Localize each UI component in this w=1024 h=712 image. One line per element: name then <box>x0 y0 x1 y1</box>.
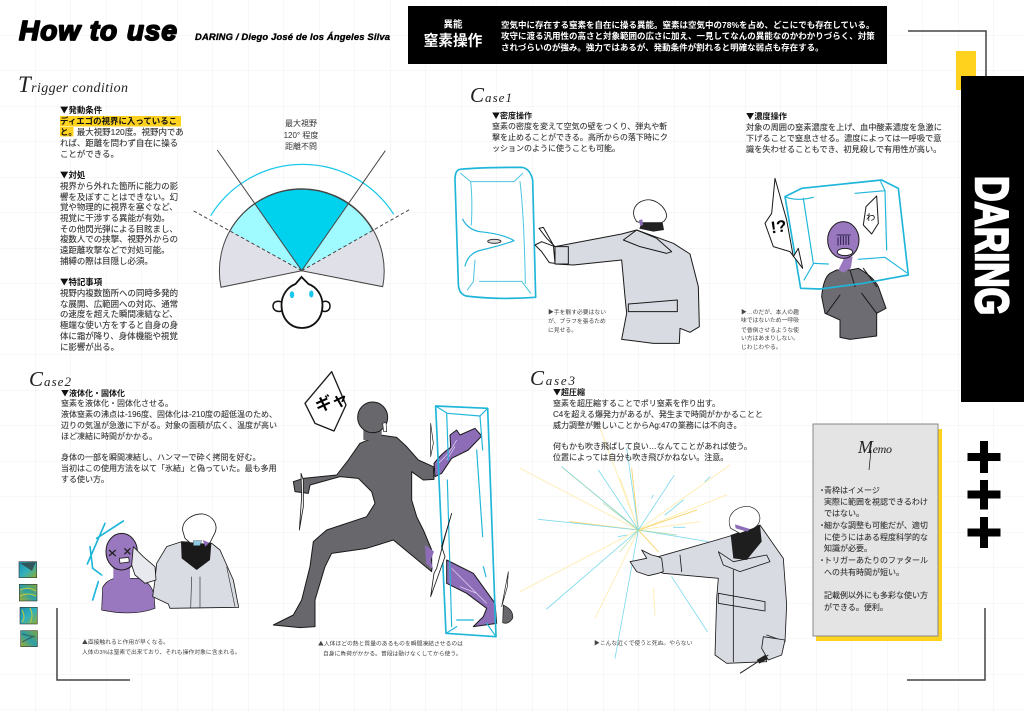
panel: ability summary: 窒素操作 <box>424 32 483 50</box>
text block: trigger conditions: 極端な使い方をすると自身の身 <box>60 320 178 330</box>
text block: liquefy and solidify: 身体の一部を瞬間凍結し、ハンマーで砕く拷問を好む。 <box>61 452 261 462</box>
yellow accent <box>956 51 976 90</box>
illustration: nitrogen cube around victim: !? <box>770 216 788 237</box>
text block: concentration control: 対象の周囲の窒素濃度を上げ、血中酸素濃度を急激に <box>746 122 942 132</box>
side banner <box>961 76 1024 402</box>
text block: super compression: 何もかも吹き飛ばして良い…なんてことがあれば使う。 <box>553 441 752 451</box>
panel: memo: 青枠はイメージ <box>824 485 880 495</box>
corner bracket: bottom left <box>57 608 130 680</box>
caption: full body freeze: 自身に負荷がかかる。普段は動けなくしてから使う。 <box>323 650 462 658</box>
icon: head from above <box>273 277 330 328</box>
title: How to use <box>19 15 177 46</box>
caption: concentration control: い方はあまりしない。 <box>741 334 799 342</box>
text block: density control: 撃を止めることができる。高所からの落下時にク <box>492 132 668 142</box>
heading: case 3: Case3 <box>530 366 576 390</box>
panel: memo: ではない。 <box>824 509 864 518</box>
text block: super compression: ▼超圧縮 <box>553 387 585 398</box>
illustration: partially frozen figure in ice <box>273 372 513 637</box>
heading: case 1: Case1 <box>470 83 512 107</box>
icon: textured swatches <box>19 562 37 647</box>
panel: memo: 実際に範囲を視認できるわけ <box>824 497 928 507</box>
plus icons <box>968 441 1000 548</box>
text block: trigger conditions: ▼発動条件 <box>60 104 103 116</box>
chart: field of view fan <box>192 118 410 287</box>
text block: trigger conditions: 響を及ぼすことはできない。幻 <box>60 192 178 202</box>
panel: ability summary: 攻守に渡る汎用性の高さと対象範囲の広さに加え、一見してなんの異能なのかわかりづらく、対策 <box>501 31 875 41</box>
text block: trigger conditions: 視界から外れた箇所に能力の影 <box>60 181 179 191</box>
panel: memo: Memo <box>857 437 892 457</box>
text block: super compression: 威力調整が難しいことからAg:47の業務には不向き。 <box>553 420 742 430</box>
panel: memo: への共有時間が短い。 <box>824 567 904 577</box>
panel: memo: 知識が必要。 <box>824 543 872 553</box>
panel: memo: ・ <box>818 521 826 530</box>
text block: trigger conditions: 体に霜が降り、身体機能や視覚 <box>60 331 178 341</box>
text block: trigger conditions: 視覚に干渉する異能が有効。 <box>60 213 170 223</box>
text block: concentration control: 識を失わせることもでき、初見殺しで有用性が高い。 <box>746 144 941 154</box>
text block: density control: 窒素の密度を変えて空気の壁をつくり、弾丸や斬 <box>492 121 667 131</box>
illustration: nitrogen cube around victim: わ <box>866 213 875 223</box>
text block: trigger conditions: 視野内複数箇所への同時多発的 <box>60 288 178 298</box>
chart: field of view fan: 最大視野 <box>285 118 317 128</box>
text block: density control: ▼密度操作 <box>492 110 532 122</box>
caption: concentration control: で昏倒させるような使 <box>741 326 799 334</box>
panel: memo: ができる。便利。 <box>824 602 888 612</box>
caption: direct contact: ▲直接触れると作用が早くなる。 <box>82 637 169 646</box>
text block: liquefy and solidify <box>61 388 277 484</box>
text block: trigger conditions: ディエゴの視界に入っているこ <box>60 116 177 126</box>
text block: trigger conditions: ▼対処 <box>60 169 86 181</box>
text block: trigger conditions: ことができる。 <box>60 149 119 159</box>
text block: trigger conditions: と。最大視野120度。視野内であ <box>60 127 184 137</box>
illustration: touching a frozen victim <box>87 514 239 613</box>
caption: direct contact <box>82 637 241 656</box>
heading: case 2: Case2 <box>29 367 72 391</box>
panel: memo: に使うにはある程度科学的な <box>824 532 928 542</box>
caption: direct contact: 人体の3%は窒素で出来ており、それも操作対象に含まれる。 <box>82 648 241 656</box>
text block: super compression: 窒素を超圧縮することでポリ窒素を作り出す。 <box>553 398 720 408</box>
corner bracket: bottom right <box>907 608 985 680</box>
panel: ability summary: されづらいのが強み。強力ではあるが、発動条件が割れると明確な弱点も存在する。 <box>501 42 824 52</box>
panel: ability summary <box>408 6 887 64</box>
caption: full body freeze: ▲人体ほどの熱と質量のあるものを瞬間凍結させるのは <box>318 638 463 648</box>
text block: super compression: C4を超える爆発力があるが、発生まで時間がかかることと <box>553 409 763 419</box>
illustration: nitrogen cube around victim <box>765 178 908 339</box>
text block: trigger conditions: その他閃光弾による目眩まし、 <box>60 224 178 234</box>
text block: concentration control <box>746 110 942 154</box>
text block: trigger conditions: の速度を超えた瞬間凍結など、 <box>60 309 178 319</box>
text block: liquefy and solidify: する使い方。 <box>61 474 109 484</box>
panel: memo: 細かな調整も可能だが、適切 <box>824 520 928 530</box>
text block: liquefy and solidify: 液体窒素の沸点は-196度、固体化は-210度の超低温のため、 <box>61 409 277 419</box>
heading: trigger condition: Trigger condition <box>18 72 128 97</box>
panel: memo <box>813 424 942 641</box>
chart: field of view fan: 120° 程度 <box>284 130 318 140</box>
text block: super compression <box>553 387 763 462</box>
caption: full body freeze <box>318 638 463 658</box>
panel: memo: ・ <box>818 486 826 495</box>
illustration: partially frozen figure in ice: ギャ <box>313 389 350 416</box>
text block: trigger conditions: 覚や物理的に視界を塞ぐなど、 <box>60 202 178 212</box>
illustration: air wall and figure <box>455 167 699 343</box>
panel: ability summary: 空気中に存在する窒素を自在に操る異能。窒素は空気中の78%を占め、どこにでも存在している。 <box>501 20 875 30</box>
panel: memo: ・ <box>818 556 826 565</box>
subtitle: character name: DARING / Diego José de los Ángeles Silva <box>195 31 390 42</box>
caption: case 1: ▶手を翳す必要はない <box>548 307 606 316</box>
text block: trigger conditions: に影響が出る。 <box>60 342 119 352</box>
caption: concentration control: ▶…のだが、本人の趣 <box>741 307 799 316</box>
caption: concentration control <box>741 307 799 351</box>
panel: memo: トリガーあたりのファタール <box>824 555 928 565</box>
text block: trigger conditions: 捕縛の際は目隠し必須。 <box>60 256 153 266</box>
text block: trigger conditions: 遠距離攻撃などで対処可能。 <box>60 245 170 255</box>
text block: trigger conditions: れば、距離を問わず自在に操る <box>60 138 178 148</box>
text block: density control: ッションのように使うことも可能。 <box>492 143 620 153</box>
text block: liquefy and solidify: ほど凍結に時間がかかる。 <box>61 431 157 441</box>
panel: ability summary: 異能 <box>443 18 463 30</box>
panel: memo: 記載例以外にも多彩な使い方 <box>824 590 928 600</box>
caption: case 1: に見せる。 <box>548 327 577 334</box>
text block: trigger conditions <box>60 104 184 352</box>
text block: liquefy and solidify: ▼液体化・固体化 <box>61 388 125 399</box>
text block: trigger conditions: ▼特記事項 <box>60 276 103 288</box>
illustration: explosion burst and figure <box>520 428 787 673</box>
text block: trigger conditions: 複数人での挟撃、視野外からの <box>60 234 178 244</box>
caption: case 1 <box>548 307 606 334</box>
text block: liquefy and solidify: 窒素を液体化・固体化させる。 <box>61 398 173 408</box>
text block: liquefy and solidify: 辺りの気温が急激に下がる。対象の面積が広く、温度が高い <box>61 420 277 430</box>
caption: concentration control: じわじわやる。 <box>741 343 782 351</box>
corner bracket: top right <box>908 31 986 76</box>
text block: density control <box>492 110 668 153</box>
chart: field of view fan: 距離不問 <box>285 141 317 151</box>
text block: concentration control: 下げることで窒息させる。濃度によっては一呼吸で意 <box>746 133 941 143</box>
caption: case 1: が、ブラフを張るため <box>548 317 606 325</box>
text block: concentration control: ▼濃度操作 <box>746 110 787 122</box>
caption: concentration control: 味ではないため一呼吸 <box>741 316 799 324</box>
text block: super compression: 位置によっては自分も吹き飛びかねない。注意。 <box>553 452 728 462</box>
text block: trigger conditions: な展開、広範囲への対応、通常 <box>60 299 178 309</box>
text block: liquefy and solidify: 当初はこの使用方法を以て「氷結」と偽っていた。最も多用 <box>61 463 277 473</box>
caption: too close: ▶こんな近くで使うと死ぬ。やらない <box>594 638 693 647</box>
side banner: DARING <box>966 176 1018 315</box>
